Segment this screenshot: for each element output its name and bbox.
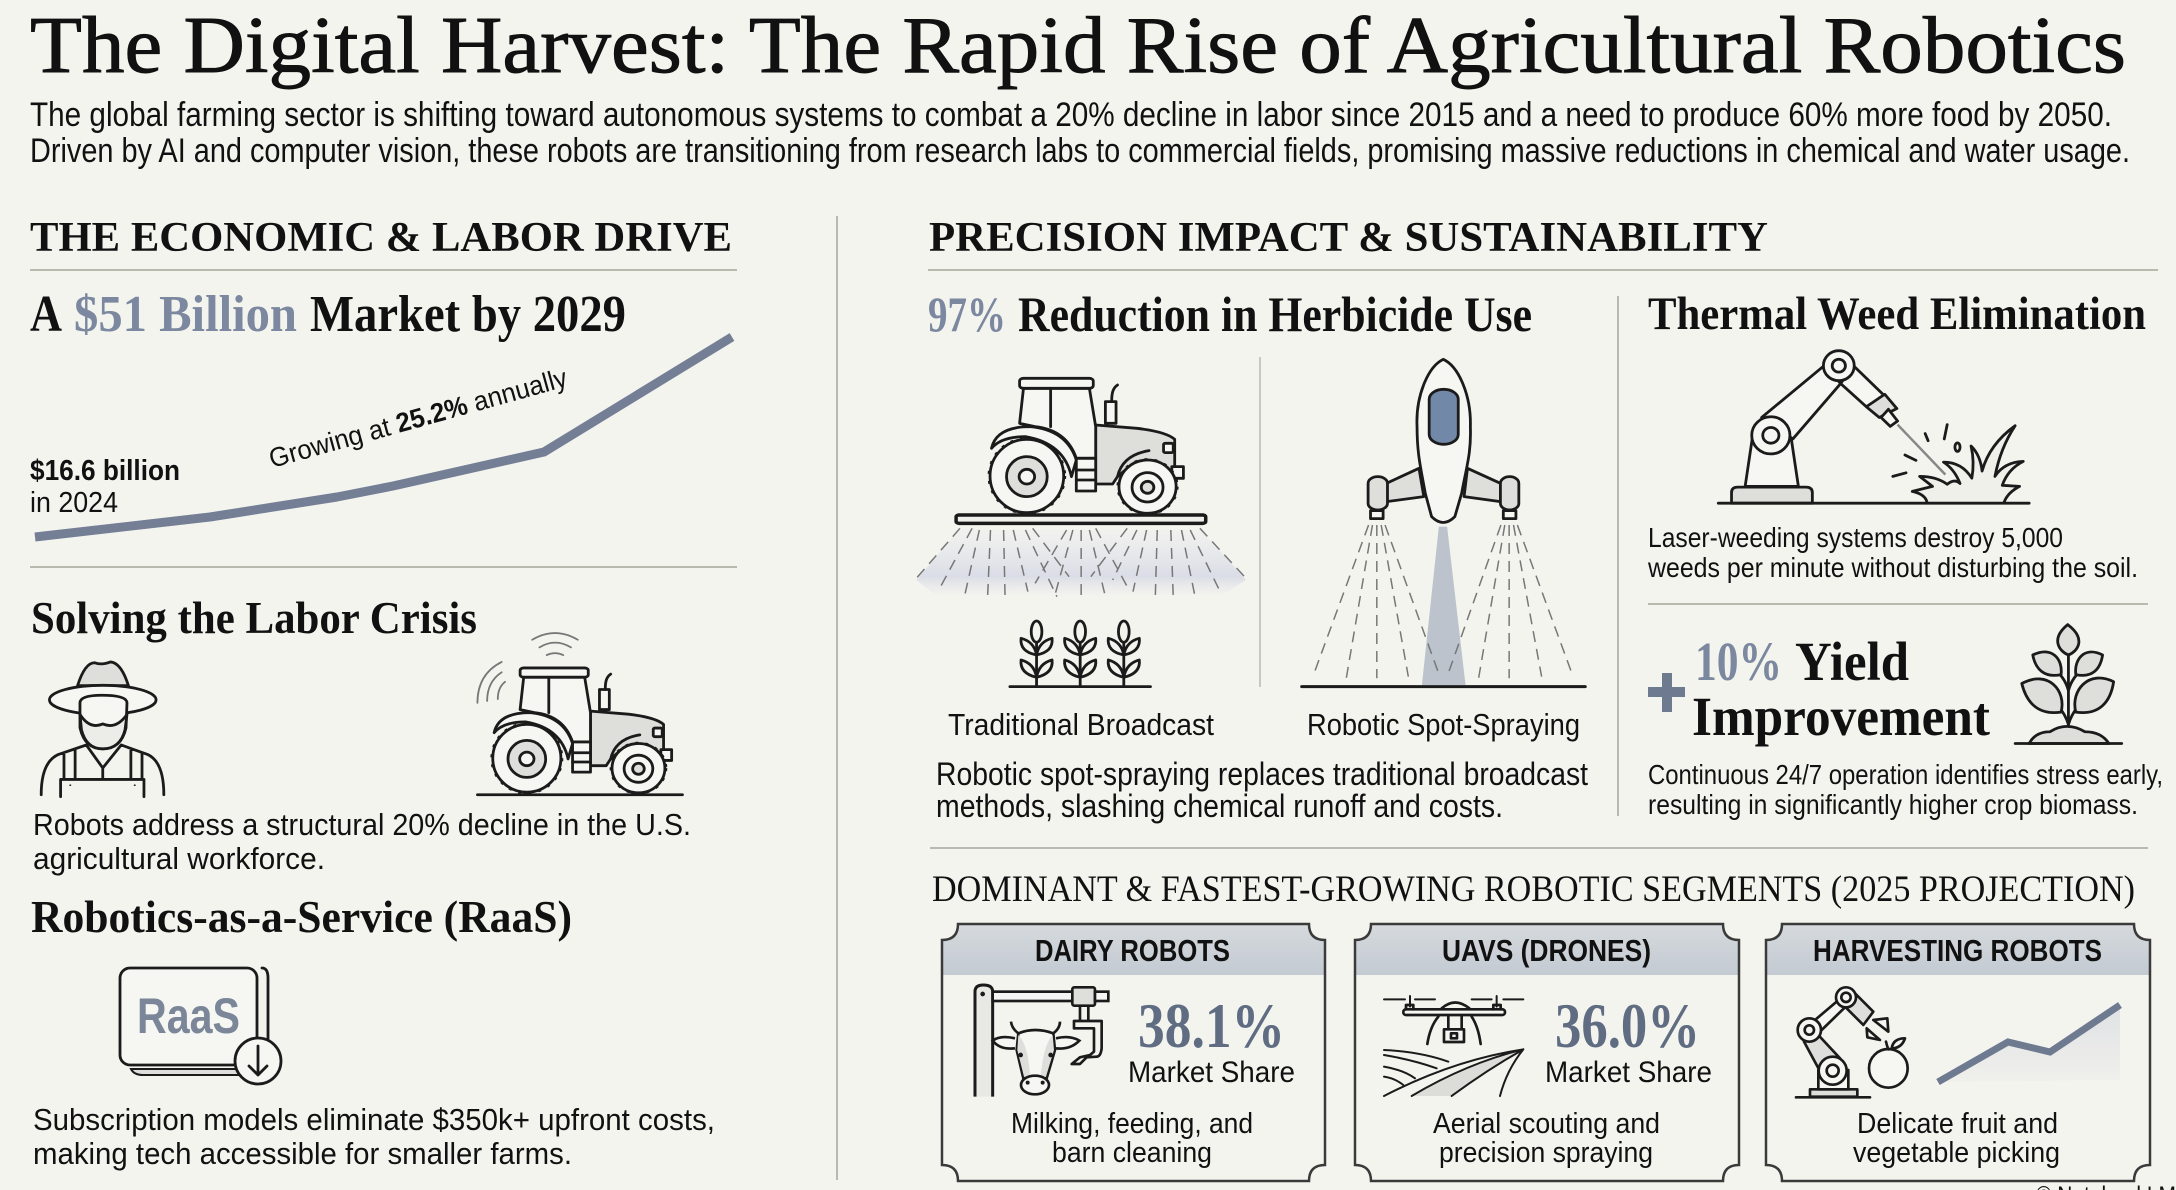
heading: herbicide reduction: 97% bbox=[928, 286, 1006, 342]
heading: market size: Market by 2029 bbox=[310, 286, 626, 343]
card: dairy robots: Milking, feeding, and bbox=[1011, 1108, 1253, 1140]
line chart: market growth: $16.6 billion bbox=[30, 455, 180, 487]
heading: market size: $51 Billion bbox=[74, 286, 297, 343]
text: laser weeding description: Laser-weeding systems destroy 5,000 bbox=[1648, 522, 2063, 553]
card: UAVs (drones): Aerial scouting and bbox=[1433, 1108, 1660, 1140]
label: traditional broadcast: Traditional Broadcast bbox=[948, 707, 1214, 742]
icon: plus sign bbox=[1648, 673, 1685, 712]
line chart: market growth: in 2024 bbox=[30, 487, 118, 519]
heading: herbicide reduction: Reduction in Herbicide Use bbox=[1018, 286, 1532, 342]
icon: tractor broadcast spraying bbox=[916, 378, 1246, 597]
card: dairy robots: barn cleaning bbox=[1052, 1137, 1212, 1169]
heading: yield improvement: Improvement bbox=[1692, 686, 1991, 747]
card: harvesting robots: Delicate fruit and bbox=[1857, 1108, 2058, 1140]
card: UAVs (drones): Market Share bbox=[1545, 1056, 1712, 1089]
card: harvesting robots bbox=[1766, 924, 2150, 1181]
line chart: market growth: Growing at 25.2% annually bbox=[266, 362, 571, 474]
card: UAVs (drones): 36.0% bbox=[1555, 990, 1700, 1061]
card: UAVs (drones) bbox=[1355, 924, 1739, 1181]
text: RaaS description: Subscription models eliminate $350k+ upfront costs, bbox=[33, 1102, 715, 1137]
card: dairy robots bbox=[942, 924, 1325, 1181]
icon: laser weeding robot arm bbox=[1718, 351, 2029, 503]
card: UAVs (drones): UAVS (DRONES) bbox=[1442, 933, 1651, 968]
icon: autonomous tractor bbox=[477, 633, 682, 795]
text: herbicide description bbox=[936, 756, 1588, 824]
card: dairy robots: 38.1% bbox=[1138, 990, 1285, 1061]
card: UAVs (drones): precision spraying bbox=[1439, 1137, 1653, 1169]
text: RaaS description: making tech accessible for smaller farms. bbox=[33, 1136, 572, 1171]
text: herbicide description: methods, slashing chemical runoff and costs. bbox=[936, 788, 1503, 824]
title: The Digital Harvest: The Rapid Rise of Agricultural Robotics bbox=[30, 2, 2126, 90]
card: dairy robots: DAIRY ROBOTS bbox=[1035, 933, 1230, 968]
heading: yield improvement bbox=[1692, 631, 1991, 747]
icon: farmer bbox=[41, 662, 164, 797]
heading: market size bbox=[30, 286, 626, 343]
text: herbicide description: Robotic spot-spraying replaces traditional broadcast bbox=[936, 756, 1588, 792]
card: harvesting robots: HARVESTING ROBOTS bbox=[1813, 933, 2102, 968]
icon: spraying drone bbox=[1302, 359, 1585, 687]
heading: labor crisis: Solving the Labor Crisis bbox=[31, 592, 477, 643]
heading: yield improvement: 10% bbox=[1695, 631, 1782, 692]
text: laser weeding description bbox=[1647, 522, 2138, 583]
text: labor crisis description bbox=[33, 807, 691, 876]
icon: growing plant bbox=[2015, 625, 2122, 744]
panel: precision impact and sustainability bbox=[916, 215, 2163, 1181]
chart: harvesting growth bbox=[1938, 1005, 2120, 1082]
card: harvesting robots: vegetable picking bbox=[1853, 1137, 2060, 1169]
icon: crops bbox=[1010, 621, 1150, 687]
card: dairy robots: Market Share bbox=[1128, 1056, 1295, 1089]
text: yield description bbox=[1648, 759, 2163, 820]
icon: milking robot and cow bbox=[975, 985, 1108, 1097]
text: labor crisis description: Robots address a structural 20% decline in the U.S. bbox=[33, 807, 691, 842]
heading: precision impact: PRECISION IMPACT & SUSTAINABILITY bbox=[929, 215, 1768, 261]
heading: economic and labor drive: THE ECONOMIC & LABOR DRIVE bbox=[30, 215, 732, 261]
panel: economic and labor drive bbox=[30, 215, 737, 1171]
label: robotic spot-spraying: Robotic Spot-Spraying bbox=[1307, 707, 1580, 742]
icon: drone over field bbox=[1384, 996, 1523, 1096]
icon: RaaS subscription: RaaS bbox=[137, 988, 240, 1044]
icon: RaaS subscription bbox=[120, 968, 281, 1084]
line chart: market growth bbox=[30, 337, 732, 537]
icon: harvesting arm and apple bbox=[1796, 987, 1908, 1097]
text: labor crisis description: agricultural workforce. bbox=[33, 841, 325, 876]
text: RaaS description bbox=[33, 1102, 715, 1171]
intro text bbox=[30, 96, 2130, 170]
heading: yield improvement: Yield bbox=[1795, 631, 1909, 692]
heading: robotics as a service: Robotics-as-a-Service (RaaS) bbox=[31, 891, 572, 942]
heading: market size: A bbox=[30, 286, 62, 343]
